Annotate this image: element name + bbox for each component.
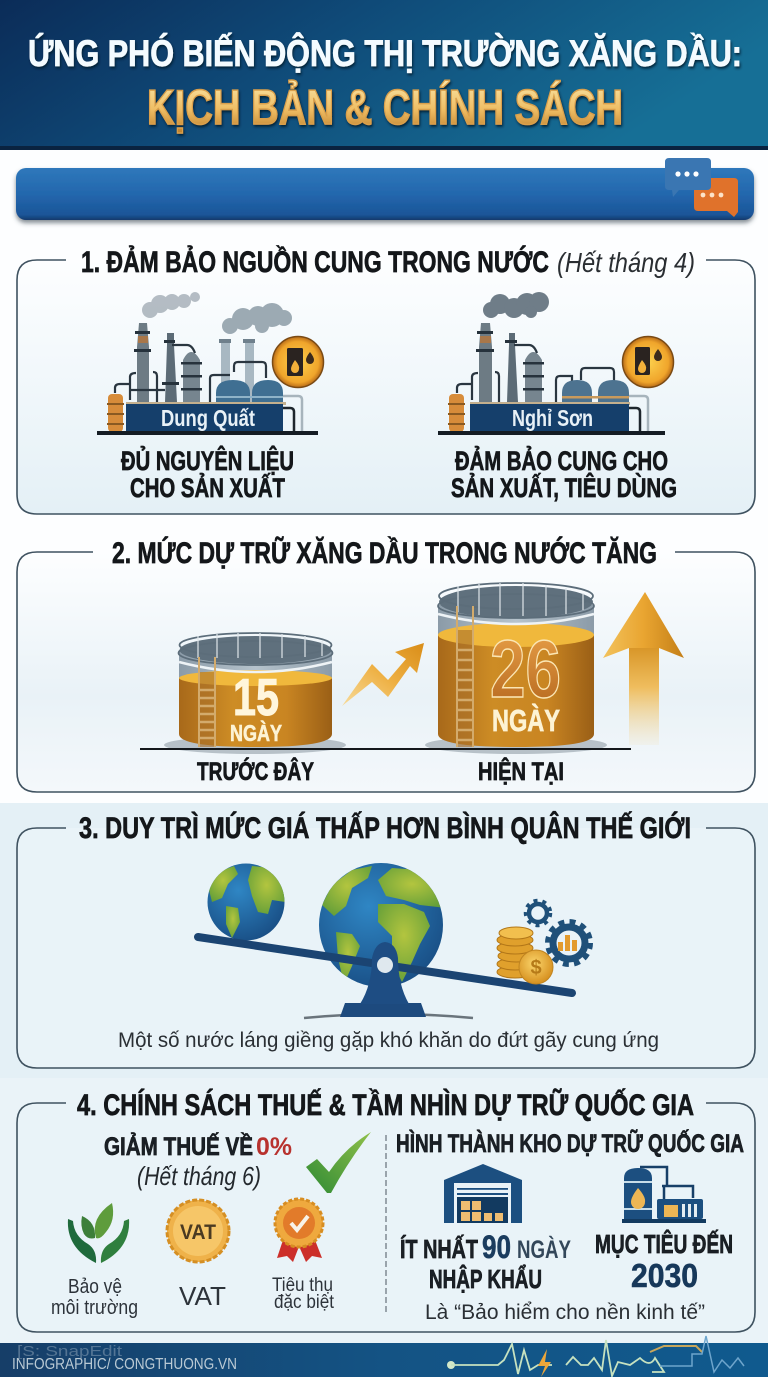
icon: gears	[526, 900, 590, 964]
icon: leaf in hands	[68, 1203, 129, 1263]
panel 4: tax and reserve	[17, 1088, 755, 1332]
icon: chat bubbles	[665, 158, 738, 217]
text: at least 90 days: NGÀY	[517, 1235, 571, 1264]
illustration: Dung Quất refinery	[97, 292, 324, 435]
label: environment: môi trường	[51, 1297, 138, 1319]
footer credit: INFOGRAPHIC/ CONGTHUONG.VN	[12, 1356, 237, 1373]
label: environment	[51, 1276, 138, 1319]
heading 1: 1. ĐẢM BẢO NGUỒN CUNG TRONG NƯỚC	[81, 245, 549, 279]
label: VAT: VAT	[179, 1281, 226, 1311]
icon: large globe	[319, 863, 446, 987]
divider	[385, 1135, 387, 1315]
icon: VAT badge: VAT	[180, 1221, 216, 1244]
text: at least 90 days: NHẬP KHẨU	[429, 1264, 542, 1294]
text: target 2030: 2030	[631, 1257, 698, 1294]
heading 1 note: (Hết tháng 4)	[557, 247, 695, 278]
text: ensure supply: ĐẢM BẢO CUNG CHO	[455, 444, 668, 476]
title line 2: KỊCH BẢN & CHÍNH SÁCH	[147, 80, 623, 135]
panel 2: reserves	[17, 536, 755, 792]
icon: storage plant	[622, 1167, 706, 1223]
label Nghỉ Sơn: Nghỉ Sơn	[512, 405, 593, 431]
label: excise: Tiêu thụ	[272, 1275, 333, 1296]
icon: VAT badge	[167, 1200, 229, 1262]
label: environment: Bảo vệ	[68, 1276, 122, 1298]
label: excise	[272, 1275, 335, 1313]
icon: big up arrow	[603, 592, 684, 745]
text: at least 90 days: 90	[482, 1229, 511, 1265]
icon: lightning	[538, 1349, 551, 1377]
text: enough feedstock	[121, 444, 294, 503]
icon: small globe	[208, 864, 285, 940]
text: at least 90 days: ÍT NHẤT	[400, 1234, 478, 1264]
tax heading: GIẢM THUẾ VỀ	[104, 1131, 253, 1161]
illustration: Nghi Sơn refinery	[438, 292, 674, 435]
label: now: HIỆN TẠI	[478, 756, 564, 786]
illustration: seesaw	[198, 937, 572, 1018]
label NGÀY: NGÀY	[492, 703, 560, 738]
baseline	[140, 748, 631, 750]
number 26: 26	[490, 624, 561, 715]
header banner	[0, 0, 768, 150]
text: economic insurance: Là “Bảo hiểm cho nền kinh tế”	[425, 1301, 705, 1324]
icon: fuel badge	[622, 336, 674, 388]
blue ribbon bar	[16, 168, 754, 220]
panel 3: prices	[17, 811, 755, 1068]
text: enough feedstock: CHO SẢN XUẤT	[130, 471, 285, 503]
label NGÀY: NGÀY	[230, 719, 282, 746]
watermark: [S: SnapEdit	[17, 1343, 123, 1360]
footer bar	[0, 1336, 768, 1377]
panel 1: domestic supply	[17, 245, 755, 514]
text: enough feedstock: ĐỦ NGUYÊN LIỆU	[121, 444, 294, 476]
icon: medal	[275, 1199, 323, 1262]
label: excise: đặc biệt	[274, 1292, 335, 1313]
label Dung Quất: Dung Quất	[161, 405, 255, 431]
number 15: 15	[233, 669, 279, 727]
icon: coins: $	[530, 957, 542, 979]
caption: Một số nước láng giềng gặp khó khăn do đứt gãy cung ứng	[118, 1029, 659, 1052]
text: at least 90 days	[400, 1229, 571, 1294]
tank: 15 days	[164, 633, 346, 754]
icon: check mark	[306, 1132, 371, 1193]
label: before: TRƯỚC ĐÂY	[197, 756, 314, 786]
text: target 2030	[595, 1229, 733, 1294]
tax heading: 0%	[256, 1133, 292, 1161]
tank: 26 days	[425, 583, 607, 754]
text: ensure supply: SẢN XUẤT, TIÊU DÙNG	[451, 471, 677, 503]
tax period: (Hết tháng 6)	[137, 1161, 261, 1191]
icon: fuel badge	[272, 336, 324, 388]
text: ensure supply	[451, 444, 677, 503]
icon: warehouse	[444, 1164, 522, 1223]
heartbeat line	[447, 1336, 744, 1376]
icon: zigzag arrow	[342, 643, 424, 706]
icon: coins	[497, 927, 553, 984]
